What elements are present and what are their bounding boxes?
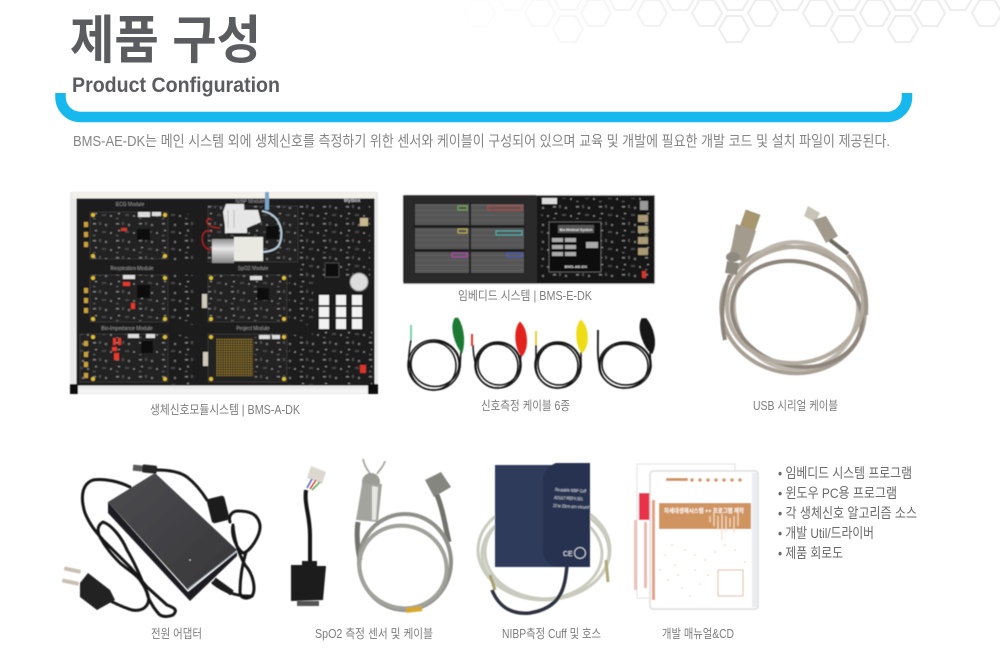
NIBP module: NIBP Module [235,199,265,205]
product: USB cable [711,206,875,385]
Bio-impedance module [80,326,168,382]
software list [778,465,917,561]
product: power adapter [62,464,260,616]
caption: USB cable: USB 시리얼 케이블 [753,399,838,413]
screen charts [415,204,524,273]
caption: bio-signal module system: 생체신호모듈시스템 | BMS-A-DK [150,403,301,417]
caption: signal cables: 신호측정 케이블 6종 [481,399,570,413]
software list: • 임베디드 시스템 프로그램 [778,465,912,481]
product: signal measurement cables [408,318,654,390]
ECG module [84,202,168,259]
software list: • 개발 Util/드라이버 [778,525,874,541]
product: NIBP cuff and hose [478,463,610,613]
Respiration module: Respiration Module [110,266,154,272]
Project module [203,326,287,382]
cuff label text [553,487,590,558]
green cable [408,318,464,390]
product: manual and CD: 차세대생체시스템 ++ 프로그램 제작 [664,507,744,515]
NIBP module [202,192,298,263]
product: embedded system [403,195,655,284]
cuff label text: Reusable NIBP Cuff [555,487,587,494]
Project module: Project Module [236,326,270,332]
yellow cable [535,320,588,388]
system block diagram [549,222,601,272]
software list: • 윈도우 PC용 프로그램 [778,485,897,501]
title: 제품 구성 [70,12,261,70]
hexagon background pattern [460,0,1000,46]
caption: SpO2 sensor: SpO2 측정 센서 및 케이블 [315,627,433,641]
SpO2 module [202,266,287,322]
subtitle: Product Configuration [72,74,280,97]
control section: buttons, knob, switch [319,198,368,373]
software list: • 각 생체신호 알고리즘 소스 [778,505,917,521]
cuff label text: 23 to 33cm arm circumf [553,503,590,510]
ECG module: ECG Module [116,202,145,208]
USB A connector [725,210,760,275]
system block diagram: Bio Medical System [560,228,592,232]
Bio-impedance module: Bio-Impedance Module [101,326,153,332]
red cable [472,322,527,388]
system block diagram: BMS-AE-DK [565,264,588,269]
caption: NIBP cuff: NIBP측정 Cuff 및 호스 [502,627,601,641]
black cable [598,319,654,388]
cuff label text: ADULT-REF#:301 [554,495,584,502]
control section: buttons, knob, switch: MyBox [344,198,361,204]
product: manual and CD [634,464,758,609]
SpO2 module: SpO2 Module [238,266,269,272]
blue header bracket [60,93,907,117]
description: BMS-AE-DK는 메인 시스템 외에 생체신호를 측정하기 위한 센서와 케이블이 구성되어 있으며 교육 및 개발에 필요한 개발 코드 및 설치 파일이 제공된다. [73,133,890,150]
caption: embedded system: 임베디드 시스템 | BMS-E-DK [458,289,593,303]
caption: power adapter: 전원 어댑터 [151,627,202,641]
cuff label text: CE [563,551,573,558]
product: SpO2 sensor and cable [348,459,458,621]
USB B connector [804,206,848,254]
caption: manual and CD: 개발 매뉴얼&CD [662,627,734,641]
Respiration module [84,266,168,322]
board texture [171,205,372,385]
product: SpO2 serial connector [291,466,326,606]
product: bio-signal module system board [70,192,378,394]
software list: • 제품 회로도 [778,545,843,561]
